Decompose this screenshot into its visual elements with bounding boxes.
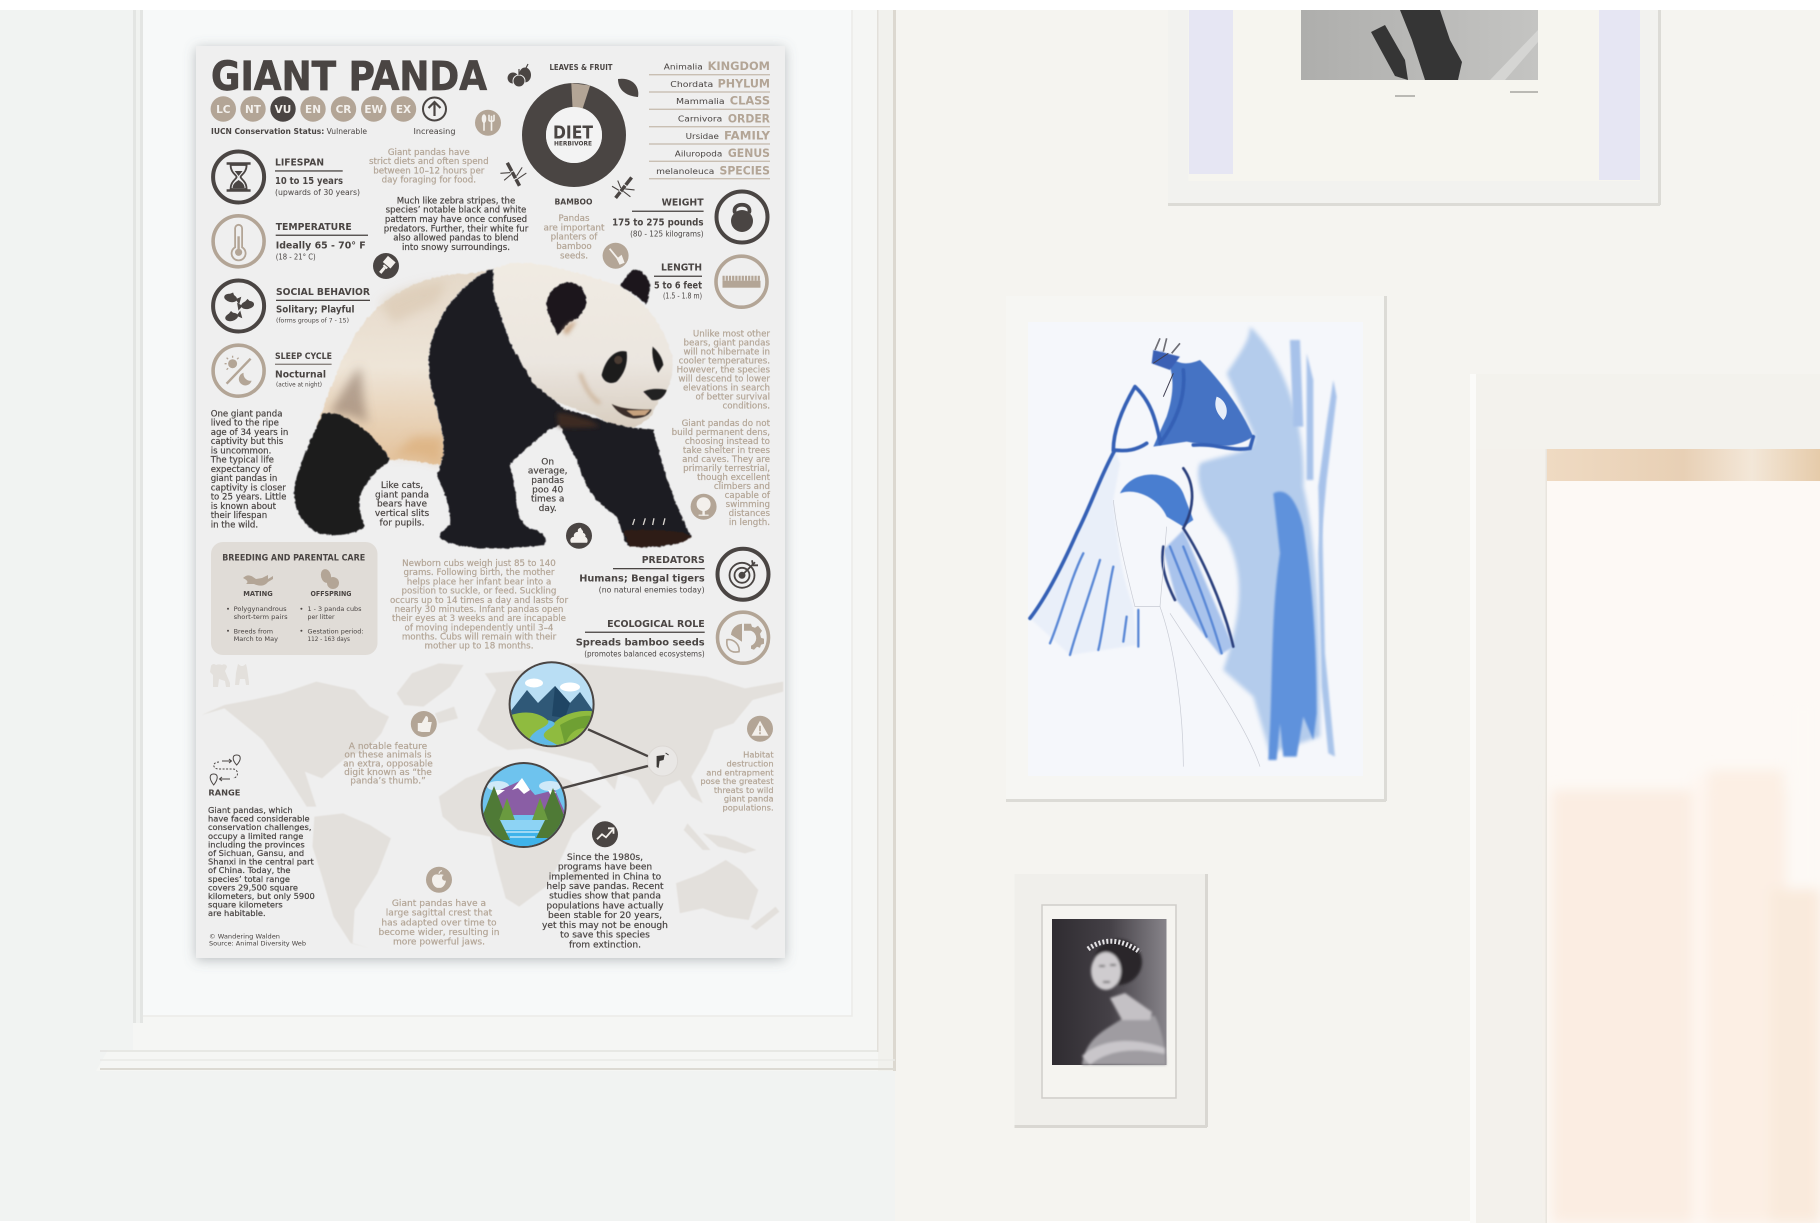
paragraph: longevity: their lifespan: [211, 511, 267, 521]
photo: giant panda: [294, 263, 692, 548]
paragraph: range: occupy a limited range: [208, 831, 303, 841]
paragraph: longevity: expectancy of: [211, 465, 272, 475]
paragraph: threats: [700, 750, 774, 813]
paragraph: vertical pupils: for pupils.: [380, 518, 424, 528]
temperature stat: (18 - 21° C): [276, 252, 316, 261]
paragraph: coat pattern: also allowed pandas to blend: [393, 234, 519, 244]
conservation status scale: CR: [336, 104, 351, 116]
paragraph: seed planters: bamboo: [556, 242, 592, 252]
paragraph: panda's thumb: panda’s thumb.”: [350, 777, 426, 787]
paragraph: seed planters: are important: [544, 223, 605, 233]
paragraph: coat pattern: [384, 196, 529, 253]
paragraph: vertical pupils: giant panda: [375, 490, 429, 500]
framed print: top right: [1168, 10, 1661, 206]
social behavior stat: SOCIAL BEHAVIOR: [276, 287, 370, 298]
paragraph: poo fact: average,: [528, 467, 568, 477]
paragraph: seed planters: planters of: [551, 233, 598, 243]
taxonomy list: SPECIES: [720, 164, 770, 178]
paragraph: range: Giant pandas, which: [208, 805, 293, 815]
paragraph: hibernation: However, the species: [677, 366, 770, 376]
paragraph: range: including the provinces: [208, 839, 305, 849]
paragraph: diet foraging: [369, 148, 489, 186]
diet donut chart: DIET: [553, 124, 593, 144]
paragraph: conservation programs: Since the 1980s,: [567, 853, 643, 863]
paragraph: longevity: captivity is closer: [211, 483, 286, 493]
icon: bamboo left: [498, 157, 530, 191]
weight stat: (80 - 125 kilograms): [630, 229, 704, 238]
paragraph: conservation programs: implemented in China to: [549, 872, 662, 882]
icon: ecosystem gear and leaf: [718, 612, 768, 663]
length stat: [654, 263, 702, 300]
icon: target: [718, 549, 768, 600]
landscape: snowy mountain and lake: [478, 762, 568, 850]
paragraph: hibernation: of better survival: [695, 392, 770, 402]
doorway and wall molding: [1470, 374, 1820, 1223]
icon: thumbs up: [411, 711, 437, 737]
sleep cycle stat: (active at night): [276, 381, 322, 389]
paragraph: vertical pupils: Like cats,: [381, 481, 423, 491]
paragraph: panda's thumb: digit known as “the: [344, 768, 432, 778]
paragraph: hibernation: cooler temperatures.: [679, 357, 770, 367]
icon: kettlebell: [716, 192, 768, 242]
icon: faint panda silhouettes: [210, 664, 249, 687]
lifespan stat: LIFESPAN: [275, 158, 324, 169]
paragraph: range: conservation challenges,: [208, 822, 311, 832]
diet donut chart: [534, 83, 614, 175]
taxonomy list: Mammalia: [676, 97, 725, 106]
taxonomy list: KINGDOM: [708, 59, 770, 73]
temperature stat: Ideally 65 - 70° F: [276, 240, 366, 251]
paragraph: sagittal crest: become wider, resulting in: [378, 928, 500, 938]
paragraph: poo fact: times a: [531, 495, 564, 505]
paragraph: shelter: Giant pandas do not: [682, 419, 771, 429]
conservation status scale: EN: [305, 104, 321, 116]
taxonomy list: ORDER: [728, 111, 770, 125]
sleep cycle stat: [275, 352, 332, 389]
credits: © Wandering Walden: [209, 933, 280, 941]
paragraph: longevity: The typical life: [210, 456, 274, 466]
panel: breeding and parental care: [211, 542, 378, 655]
paragraph: conservation programs: from extinction.: [569, 940, 641, 950]
paragraph: range: Shanxi in the central part: [208, 857, 315, 867]
paragraph: panda's thumb: on these animals is: [344, 751, 432, 761]
icon: lifespan hourglass: [213, 152, 264, 202]
paragraph: newborn cubs: of moving independently until 3–4: [405, 623, 554, 633]
paragraph: range: of China. Today, the: [208, 865, 290, 875]
paragraph: range: species’ total range: [208, 874, 290, 884]
paragraph: shelter: choosing instead to: [685, 437, 770, 447]
paragraph: longevity: is uncommon.: [211, 446, 271, 456]
panel: breeding and parental care: 1 - 3 panda cubs: [308, 606, 362, 613]
length stat: 5 to 6 feet: [654, 280, 702, 291]
diet donut chart: HERBIVORE: [554, 140, 592, 148]
paragraph: diet foraging: day foraging for food.: [382, 176, 476, 186]
conservation status scale: [211, 96, 416, 122]
panel: breeding and parental care: Breeds from: [234, 628, 273, 635]
paragraph: hibernation: elevations in search: [683, 384, 770, 394]
paragraph: coat pattern: predators. Further, their white fur: [384, 224, 529, 234]
poster: giant panda infographic: [196, 46, 785, 958]
paragraph: diet foraging: strict diets and often spend: [369, 157, 489, 167]
paragraph: vertical pupils: bears have: [377, 500, 428, 510]
paragraph: sagittal crest: Giant pandas have a: [392, 899, 486, 909]
paragraph: shelter: take shelter in trees: [683, 446, 770, 456]
paragraph: shelter: build permanent dens,: [672, 428, 770, 438]
ecological role stat: (promotes balanced ecosystems): [584, 649, 705, 658]
paragraph: threats: threats to wild: [714, 785, 774, 795]
paragraph: longevity: [210, 409, 288, 530]
icon: fork and knife: [475, 110, 501, 136]
taxonomy list: Ursidae: [686, 132, 719, 141]
panel: breeding and parental care: Gestation period:: [308, 628, 364, 635]
icon: eggs: [319, 568, 339, 589]
paragraph: seed planters: seeds.: [560, 251, 588, 261]
title: GIANT PANDA: [211, 54, 487, 100]
social behavior stat: [276, 287, 370, 325]
panel: breeding and parental care: Polygynandrous: [234, 606, 287, 613]
length stat: LENGTH: [661, 263, 702, 274]
length stat: (1.5 - 1.8 m): [663, 291, 702, 300]
paragraph: shelter: primarily terrestrial,: [683, 464, 770, 474]
landscape: mountains and river: [508, 660, 596, 750]
paragraph: conservation programs: [542, 853, 668, 950]
paragraph: conservation programs: yet this may not be enough: [542, 921, 668, 931]
icon: sleep cycle sun and moon: [213, 345, 264, 396]
social behavior stat: Solitary; Playful: [276, 305, 354, 316]
paragraph: newborn cubs: helps place her infant bear into a: [407, 577, 551, 587]
framed photo: queen portrait: [1014, 874, 1208, 1128]
conservation status scale: NT: [245, 104, 262, 116]
weight stat: WEIGHT: [662, 198, 704, 209]
sleep cycle stat: Nocturnal: [275, 369, 326, 380]
paragraph: hibernation: [677, 330, 770, 411]
paragraph: vertical pupils: [375, 481, 429, 528]
paragraph: longevity: captivity but this: [211, 437, 284, 447]
panel: breeding and parental care: March to May: [234, 636, 278, 643]
paragraph: hibernation: will descend to lower: [678, 375, 770, 385]
icon: temperature thermometer: [213, 216, 264, 267]
paragraph: range: have faced considerable: [208, 814, 310, 824]
temperature stat: [276, 222, 368, 261]
sleep cycle stat: SLEEP CYCLE: [275, 352, 332, 362]
paragraph: poo fact: poo 40: [532, 485, 563, 495]
paragraph: panda's thumb: [343, 742, 433, 787]
panel: breeding and parental care: per litter: [308, 614, 335, 621]
paragraph: threats: pose the greatest: [700, 776, 774, 786]
taxonomy list: FAMILY: [724, 129, 771, 143]
ecological role stat: Spreads bamboo seeds: [576, 638, 705, 649]
paragraph: seed planters: Pandas: [558, 214, 590, 224]
conservation status text: IUCN Conservation Status: Vulnerable: [211, 127, 367, 136]
paragraph: threats: destruction: [727, 758, 774, 768]
leaves and fruit label: LEAVES & FRUIT: [550, 63, 613, 72]
connector lines: [563, 729, 649, 788]
paragraph: newborn cubs: their eyes at 3 weeks and are incapable: [392, 614, 566, 624]
paragraph: sagittal crest: large sagittal crest that: [386, 909, 493, 919]
taxonomy list: Animalia: [664, 62, 703, 72]
taxonomy list: Chordata: [670, 80, 713, 89]
paragraph: newborn cubs: nearly 30 minutes. Infant pandas open: [395, 605, 563, 615]
paragraph: sagittal crest: more powerful jaws.: [393, 938, 485, 948]
conservation status scale: EX: [396, 104, 411, 116]
paragraph: longevity: in the wild.: [211, 520, 258, 530]
predators stat: (no natural enemies today): [599, 585, 705, 594]
panel: breeding and parental care: 112 - 163 days: [308, 636, 350, 643]
paragraph: conservation programs: help save pandas. Recent: [546, 882, 664, 892]
icon: range route: [210, 755, 240, 785]
taxonomy list: Ailuropoda: [675, 149, 722, 158]
paragraph: sagittal crest: [378, 899, 500, 948]
icon: stork: [243, 575, 273, 586]
credits: [209, 933, 306, 948]
paragraph: newborn cubs: occurs up to 14 times a day and lasts for: [390, 596, 568, 606]
paragraph: hibernation: will not hibernate in: [683, 348, 770, 358]
weight stat: 175 to 275 pounds: [612, 218, 704, 229]
paragraph: longevity: age of 34 years in: [211, 428, 288, 438]
bamboo label: BAMBOO: [554, 198, 593, 207]
paragraph: poo fact: pandas: [531, 476, 564, 486]
paragraph: hibernation: conditions.: [723, 401, 770, 411]
locator circle: china range: [648, 746, 678, 776]
icon: social fish: [213, 280, 264, 332]
predators stat: [579, 555, 705, 594]
icon: poo: [566, 523, 592, 549]
paragraph: threats: Habitat: [743, 750, 774, 760]
paragraph: longevity: One giant panda: [211, 409, 282, 419]
weight stat: [612, 198, 704, 238]
framed painting: blue watercolor: [1006, 296, 1387, 802]
icon: trend chart: [592, 821, 618, 847]
paragraph: newborn cubs: Newborn cubs weigh just 85 to 140: [402, 559, 556, 569]
icon: fruit: [508, 64, 531, 87]
paragraph: shelter: climbers and: [714, 482, 770, 492]
predators stat: PREDATORS: [642, 555, 705, 566]
paragraph: threats: giant panda: [724, 794, 774, 804]
paragraph: range: square kilometers: [208, 900, 283, 910]
paragraph: threats: populations.: [722, 803, 774, 813]
panel: breeding and parental care: BREEDING AND PARENTAL CARE: [222, 553, 365, 563]
icon: tree: [691, 494, 717, 520]
taxonomy list: Carnivora: [678, 114, 722, 124]
paragraph: vertical pupils: vertical slits: [375, 509, 429, 519]
paragraph: shelter: capable of: [725, 491, 771, 501]
paragraph: sagittal crest: has adapted over time to: [381, 918, 497, 928]
paragraph: poo fact: On: [541, 457, 554, 467]
lifespan stat: (upwards of 30 years): [275, 188, 360, 197]
paragraph: longevity: giant pandas in: [211, 474, 277, 484]
taxonomy list: GENUS: [728, 146, 770, 160]
poster sheet: [196, 46, 785, 958]
predators stat: Humans; Bengal tigers: [579, 574, 705, 585]
range heading: RANGE: [208, 789, 240, 798]
paragraph: panda's thumb: A notable feature: [349, 742, 428, 752]
paragraph: range: of Sichuan, Gansu, and: [208, 848, 304, 858]
paragraph: range: are habitable.: [208, 908, 266, 918]
paragraph: range: [208, 805, 315, 918]
taxonomy list: PHYLUM: [718, 76, 770, 90]
paragraph: conservation programs: programs have been: [558, 863, 652, 873]
paragraph: coat pattern: species’ notable black and white: [386, 206, 526, 216]
lifespan stat: [275, 158, 360, 197]
paragraph: coat pattern: Much like zebra stripes, the: [397, 196, 515, 206]
paragraph: newborn cubs: grams. Following birth, the mother: [404, 568, 555, 578]
conservation status scale: VU: [275, 104, 291, 116]
icon: apple: [426, 867, 452, 893]
paragraph: panda's thumb: an extra, opposable: [343, 759, 433, 769]
icon: shovel: [603, 243, 629, 269]
paragraph: range: covers 29,500 square: [208, 882, 298, 892]
paragraph: conservation programs: populations have actually: [546, 901, 664, 911]
paragraph: longevity: is known about: [211, 502, 277, 512]
conservation status scale: EW: [364, 104, 383, 116]
credits: Source: Animal Diversity Web: [209, 941, 306, 948]
panel: breeding and parental care: short-term pairs: [234, 614, 288, 621]
ecological role stat: ECOLOGICAL ROLE: [607, 619, 705, 630]
paragraph: longevity: lived to the ripe: [211, 419, 279, 429]
paragraph: shelter: swimming: [726, 500, 770, 510]
wall panel molding frame: [96, 10, 896, 1071]
panel: breeding and parental care: OFFSPRING: [310, 590, 352, 598]
paragraph: newborn cubs: position to suckle, or feed. Suckling: [402, 587, 556, 597]
taxonomy list: melanoleuca: [656, 167, 714, 176]
conservation status scale: LC: [216, 104, 231, 116]
paragraph: diet foraging: between 10–12 hours per: [373, 166, 485, 176]
paragraph: hibernation: bears, giant pandas: [684, 339, 770, 349]
paragraph: shelter: [672, 419, 771, 528]
paragraph: newborn cubs: mother up to 18 months.: [425, 642, 533, 652]
paragraph: newborn cubs: [390, 559, 568, 652]
paragraph: poo fact: day.: [539, 504, 557, 514]
temperature stat: TEMPERATURE: [276, 222, 352, 233]
panel: breeding and parental care: MATING: [243, 590, 273, 598]
icon: paint brush: [373, 253, 399, 279]
paragraph: seed planters: [544, 214, 605, 261]
paragraph: coat pattern: into snowy surroundings.: [402, 243, 510, 253]
social behavior stat: (forms groups of 7 - 15): [276, 317, 349, 325]
icon: warning: [747, 716, 773, 742]
paragraph: shelter: and caves. They are: [682, 455, 770, 465]
paragraph: diet foraging: Giant pandas have: [388, 148, 470, 158]
icon: trend up arrow: [423, 98, 446, 120]
paragraph: conservation programs: to save this species: [560, 931, 650, 941]
population trend label: Increasing: [414, 127, 456, 136]
paragraph: conservation programs: been stable for 20 years,: [548, 911, 662, 921]
paragraph: conservation programs: studies show that panda: [549, 892, 661, 902]
paragraph: hibernation: Unlike most other: [693, 330, 770, 340]
icon: ruler: [716, 256, 767, 307]
paragraph: poo fact: [528, 457, 568, 514]
paragraph: threats: and entrapment: [706, 767, 774, 777]
paragraph: coat pattern: pattern may have once confused: [385, 215, 527, 225]
lifespan stat: 10 to 15 years: [275, 176, 343, 187]
paragraph: shelter: in length.: [729, 518, 770, 528]
paragraph: shelter: distances: [729, 509, 770, 519]
paragraph: newborn cubs: months. Cubs will remain with their: [402, 632, 557, 642]
icon: bamboo right: [608, 171, 640, 205]
paragraph: shelter: though excellent: [697, 473, 771, 483]
paragraph: range: kilometers, but only 5900: [208, 891, 315, 901]
icon: leaf: [618, 79, 638, 97]
taxonomy list: CLASS: [730, 94, 770, 108]
paragraph: longevity: to 25 years. Little: [211, 493, 286, 503]
ecological role stat: [576, 619, 705, 658]
world map background: [201, 663, 783, 948]
taxonomy list: [649, 59, 771, 179]
